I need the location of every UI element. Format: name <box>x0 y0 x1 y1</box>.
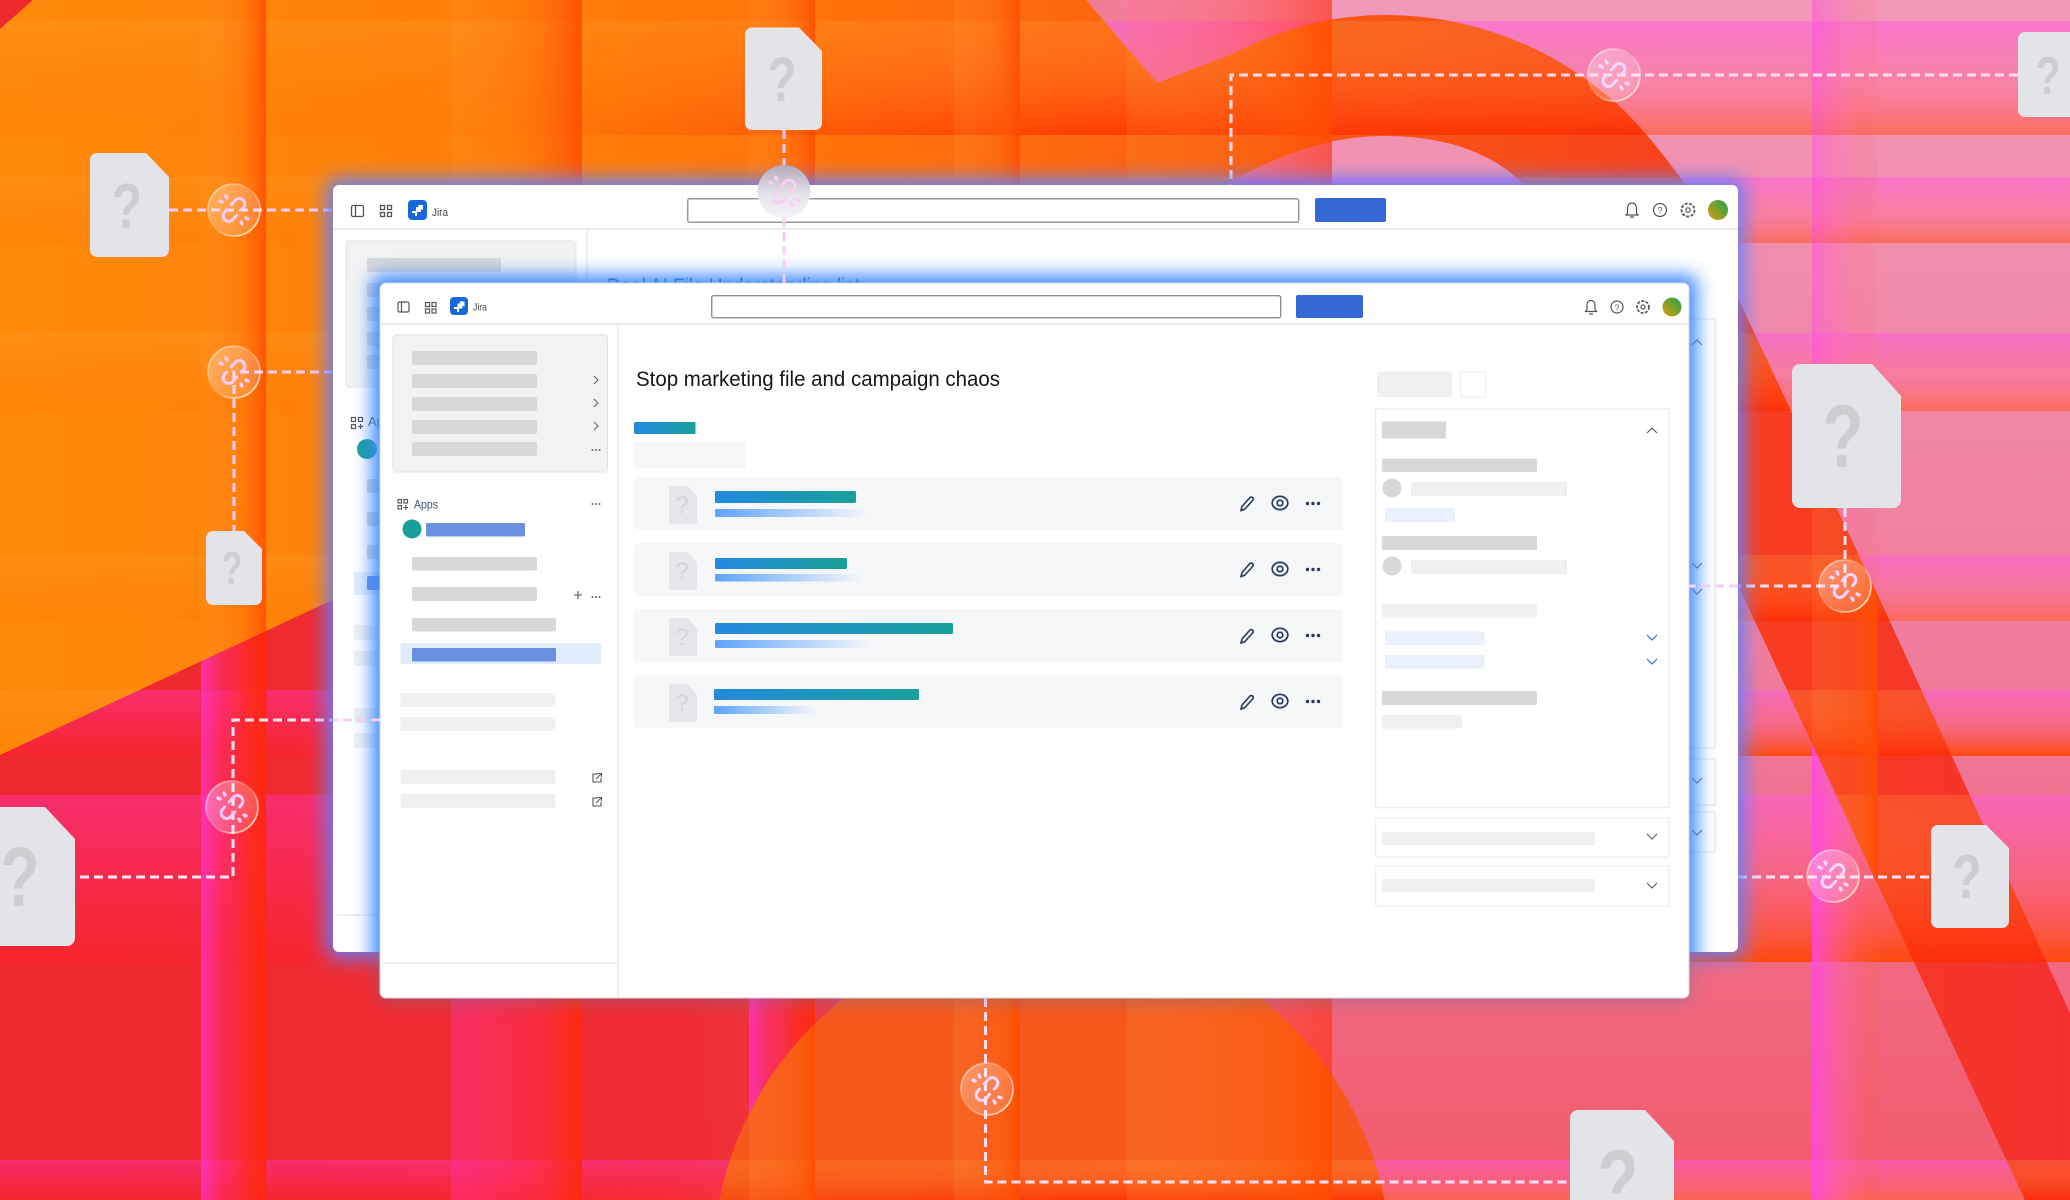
file row 1 <box>634 477 1343 530</box>
icon: document top left <box>90 153 169 257</box>
right details column <box>1376 372 1669 906</box>
title: Stop marketing file and campaign chaos <box>636 368 1000 391</box>
icon: document left lower <box>0 807 75 946</box>
file row 1: ? <box>675 492 689 519</box>
label chip <box>634 422 696 434</box>
back window sidebar <box>337 229 600 915</box>
back window sidebar: Apps <box>368 414 398 429</box>
icon: document left small <box>206 531 262 605</box>
icon: document top right: ? <box>2036 46 2060 106</box>
back window toolbar: ? <box>1657 206 1663 216</box>
icon: broken link node on window edge <box>758 165 810 218</box>
panel: back window <box>333 185 1738 952</box>
icon: document top centre: ? <box>768 45 796 115</box>
front window toolbar: Jira <box>473 302 487 314</box>
icon: document top centre <box>745 28 822 130</box>
icon: broken link node, left lower <box>206 781 258 833</box>
front window toolbar: ? <box>1615 302 1620 312</box>
file row 2: ? <box>675 558 689 585</box>
icon: document right large: ? <box>1822 386 1864 486</box>
placeholder chip <box>634 442 746 468</box>
back window toolbar <box>333 198 1738 229</box>
icon: broken link node, left top <box>208 184 260 236</box>
icon: broken link node, left middle <box>208 346 260 398</box>
icon: document left small: ? <box>222 542 242 594</box>
file row 2 <box>634 543 1343 596</box>
icon: broken link node, right middle <box>1819 560 1871 612</box>
back window heading: Deal AI File Understanding list <box>607 275 860 298</box>
back window toolbar: Jira <box>432 207 449 219</box>
icon: broken link node, right lower <box>1807 850 1859 902</box>
back window right column <box>1600 319 1715 852</box>
file row 4 <box>634 675 1343 728</box>
icon: document right lower: ? <box>1952 843 1982 912</box>
icon: document bottom <box>1570 1110 1674 1200</box>
icon: document right lower <box>1931 825 2009 928</box>
shadow behind front window <box>380 283 1689 1000</box>
front window sidebar: Apps <box>414 500 438 512</box>
front window sidebar <box>383 324 618 997</box>
icon: broken link node, top right <box>1588 49 1640 101</box>
panel: front window <box>380 283 1689 998</box>
glow behind back window <box>327 179 1744 958</box>
icon: document right large <box>1792 364 1901 508</box>
icon: document left lower: ? <box>0 830 40 924</box>
icon: document top left: ? <box>112 170 142 242</box>
icon: broken link node, bottom <box>961 1063 1013 1115</box>
blue glow of front window over back window <box>372 275 1697 1006</box>
file row 3: ? <box>675 624 689 651</box>
icon: document top right <box>2018 32 2070 117</box>
front window toolbar <box>380 295 1689 324</box>
file row 3 <box>634 609 1343 662</box>
lilac connectors crossing back window <box>333 218 1738 720</box>
file row 4: ? <box>675 690 689 717</box>
